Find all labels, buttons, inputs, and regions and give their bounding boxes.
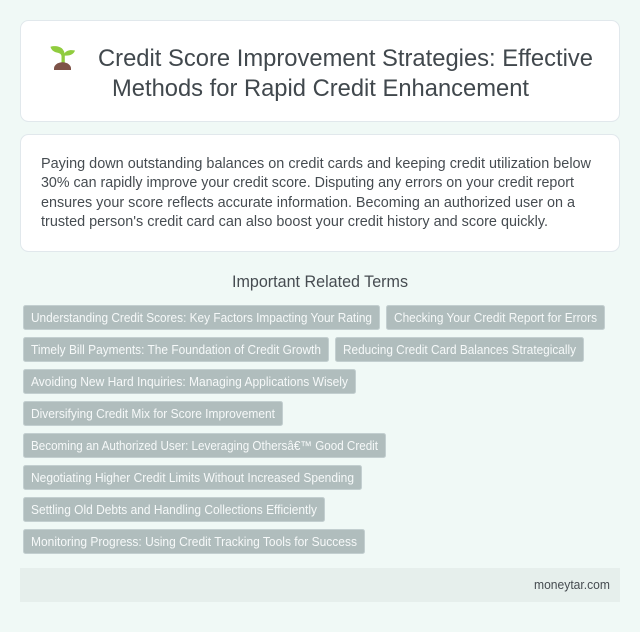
tag: understanding credit scores	[24, 306, 380, 330]
tag: higher credit limits	[24, 466, 362, 490]
tag: avoiding hard inquiries: Avoiding New Hard Inquiries: Managing Applications Wisely	[31, 375, 349, 389]
summary paragraph: trusted person's credit card can also boost your credit history and score quickly.	[41, 213, 548, 230]
tag: diversifying credit mix: Diversifying Credit Mix for Score Improvement	[31, 407, 275, 421]
panel: related term tags	[24, 306, 604, 554]
tag: timely bill payments: Timely Bill Payments: The Foundation of Credit Growth	[31, 343, 321, 357]
summary paragraph: Paying down outstanding balances on credit cards and keeping credit utilization below	[41, 155, 591, 172]
summary paragraph: 30% can rapidly improve your credit score. Disputing any errors on your credit report	[41, 174, 575, 191]
panel: summary text card	[20, 134, 620, 252]
footer source text: moneytar.com	[534, 578, 610, 592]
tag: higher credit limits: Negotiating Higher Credit Limits Without Increased Spending	[31, 471, 354, 485]
icon: seedling	[50, 46, 75, 70]
title: Methods for Rapid Credit Enhancement	[112, 75, 529, 102]
tag: checking credit report: Checking Your Credit Report for Errors	[394, 311, 597, 325]
tag: authorized user: Becoming an Authorized User: Leveraging Othersâ€™ Good Credit	[31, 439, 378, 453]
tag: avoiding hard inquiries	[24, 370, 356, 394]
tag: reducing balances	[336, 338, 584, 362]
footer bar	[20, 568, 620, 602]
tag: monitoring progress: Monitoring Progress: Using Credit Tracking Tools for Success	[31, 535, 357, 549]
tag: diversifying credit mix	[24, 402, 282, 426]
tag: understanding credit scores: Understanding Credit Scores: Key Factors Impacting Your Rating	[31, 311, 372, 325]
summary paragraph	[41, 155, 591, 230]
title	[98, 45, 593, 102]
summary paragraph: ensures your score reflects accurate information. Becoming an authorized user on a	[41, 194, 576, 211]
tag: checking credit report	[386, 306, 604, 330]
panel: title card	[20, 20, 620, 122]
heading: related terms: Important Related Terms	[232, 273, 408, 291]
tag: settling old debts	[24, 498, 324, 522]
tag: settling old debts: Settling Old Debts and Handling Collections Efficiently	[31, 503, 318, 517]
tag: authorized user	[24, 434, 386, 458]
tag: reducing balances: Reducing Credit Card Balances Strategically	[343, 343, 577, 357]
tag: monitoring progress	[24, 530, 364, 554]
tag: timely bill payments	[24, 338, 328, 362]
title: Credit Score Improvement Strategies: Effective	[98, 45, 593, 72]
